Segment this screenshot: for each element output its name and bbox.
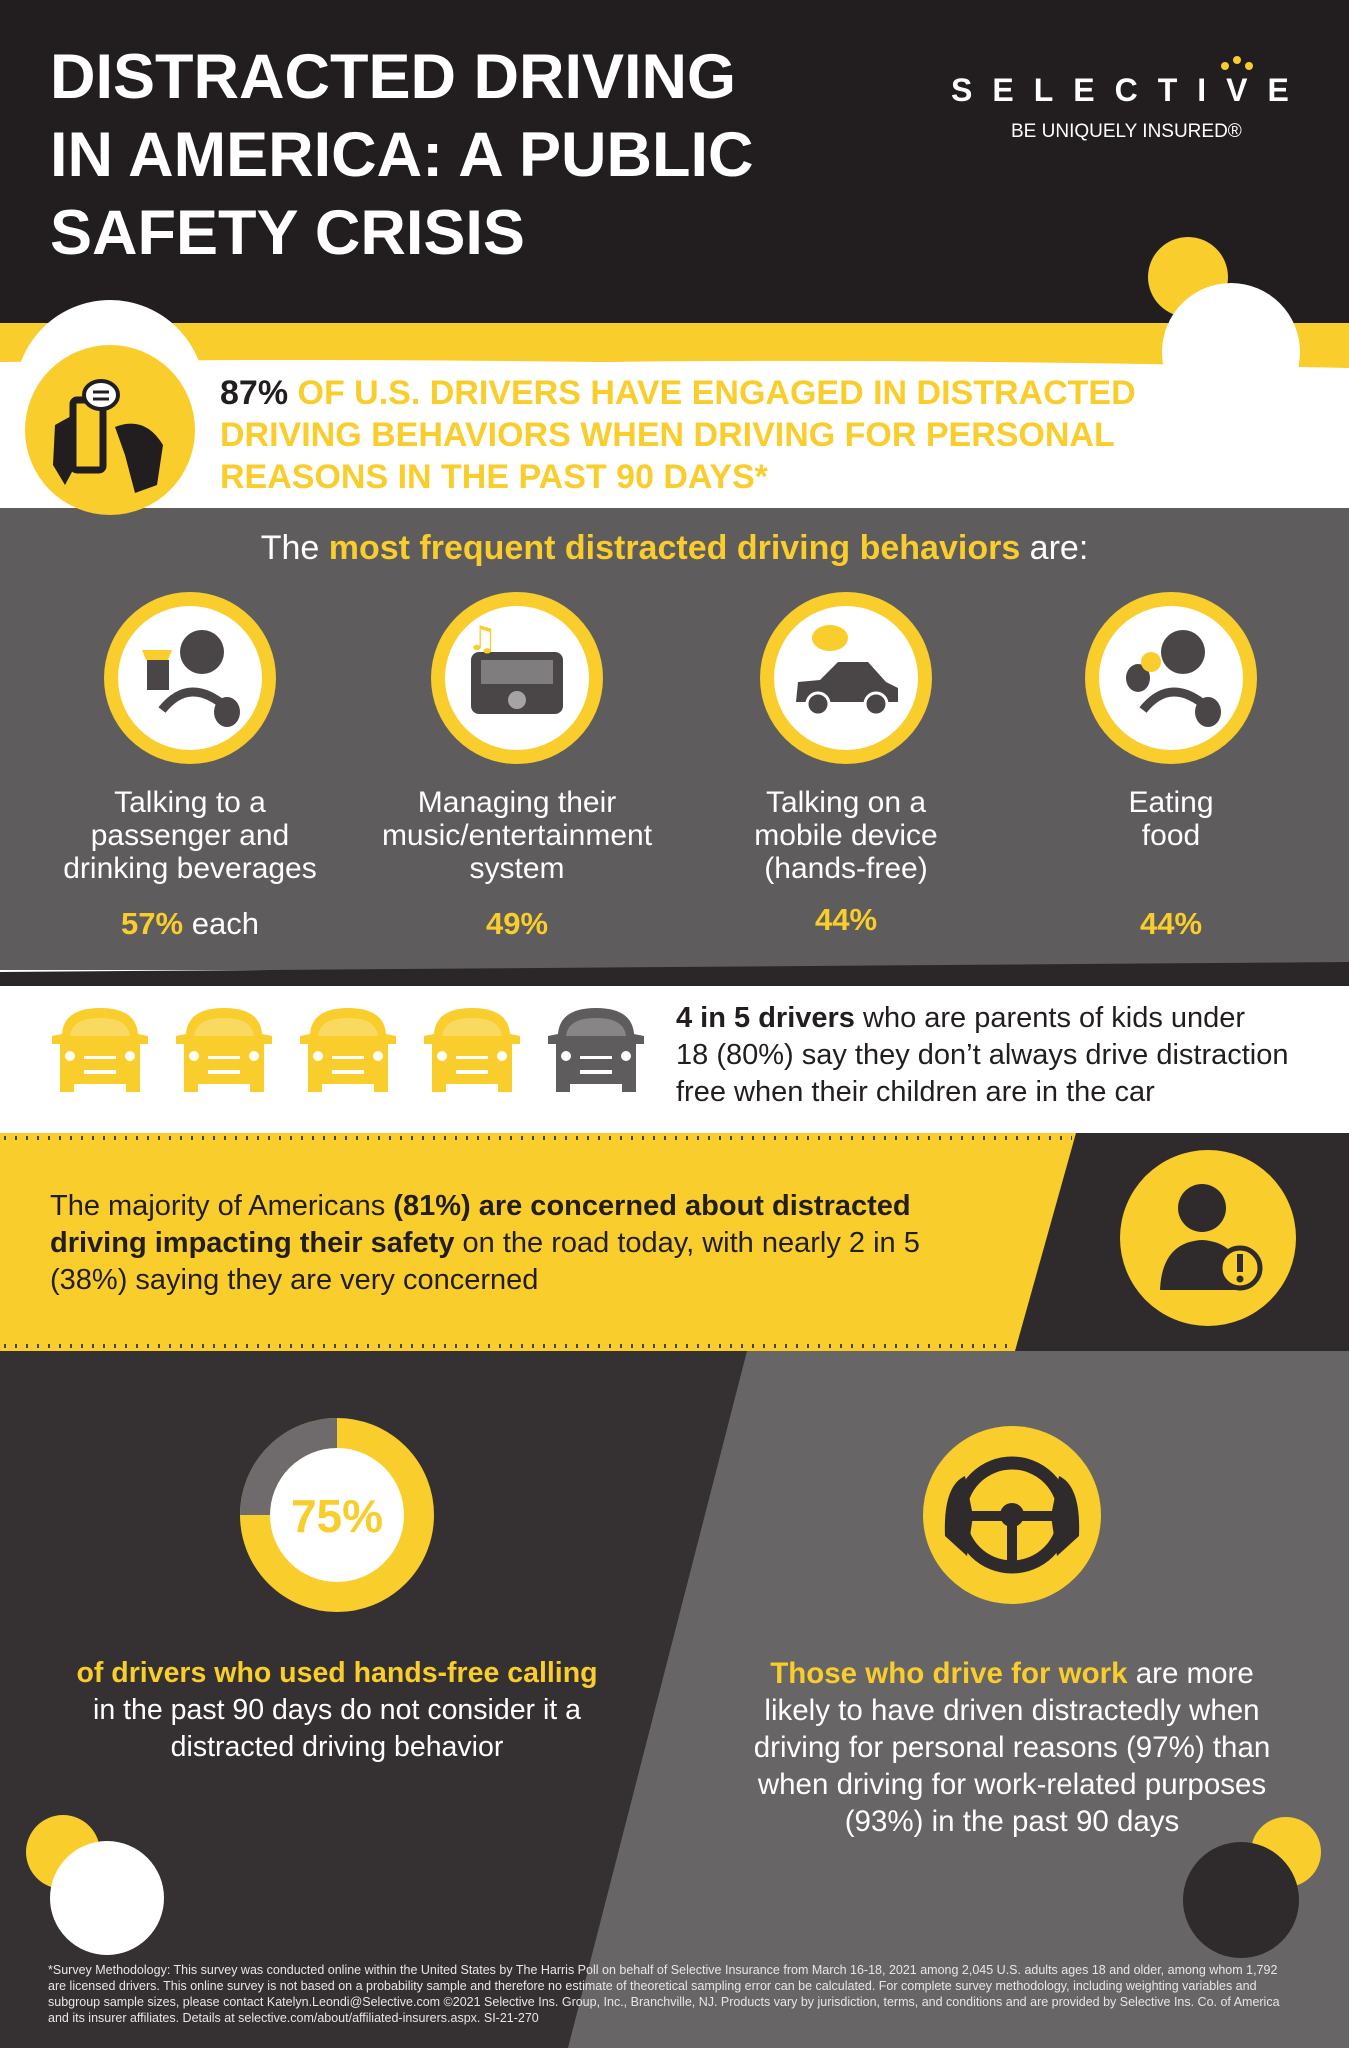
drive for work text: likely to have driven distractedly when: [764, 1694, 1260, 1727]
behaviors heading: The most frequent distracted driving behaviors are:: [261, 529, 1088, 567]
behavior 3: mobile hands-free: (hands-free): [764, 852, 928, 885]
behavior 1: talking and drinking: Talking to a: [114, 786, 266, 819]
behavior 4: eating: [1085, 592, 1257, 941]
concern statistic text: [50, 1190, 920, 1296]
title: DISTRACTED DRIVING: [50, 42, 736, 112]
icon: person with alert: [1120, 1150, 1296, 1326]
concern statistic text: driving impacting their safety on the road today, with nearly 2 in 5: [50, 1227, 920, 1259]
behavior 3: mobile hands-free: mobile device: [754, 819, 938, 852]
behavior 2: music: music/entertainment: [382, 819, 652, 852]
parents statistic text: 4 in 5 drivers who are parents of kids under: [676, 1002, 1245, 1034]
behavior 4: eating: 44%: [1140, 906, 1202, 941]
behavior 3: mobile hands-free: Talking on a: [766, 786, 926, 819]
parents statistic text: free when their children are in the car: [676, 1076, 1155, 1108]
icon: radio: [431, 592, 603, 764]
headline 87%: 87% OF U.S. DRIVERS HAVE ENGAGED IN DISTRACTED: [220, 374, 1136, 412]
title: IN AMERICA: A PUBLIC: [50, 120, 753, 190]
hands-free text: of drivers who used hands-free calling: [76, 1657, 598, 1689]
behavior 4: eating: Eating: [1128, 786, 1214, 819]
behavior 1: talking and drinking: drinking beverages: [63, 852, 317, 885]
behavior 2: music: Managing their: [418, 786, 616, 819]
headline 87%: DRIVING BEHAVIORS WHEN DRIVING FOR PERSONAL: [220, 416, 1115, 454]
behavior 3: mobile hands-free: [754, 592, 938, 937]
behavior 4: eating: food: [1142, 819, 1200, 852]
donut chart 75%: 75%: [291, 1490, 383, 1542]
behavior 2: music: [382, 592, 652, 941]
logo: BE UNIQUELY INSURED®: [1011, 121, 1242, 142]
icon: passenger drinking: [104, 592, 276, 764]
logo: [951, 56, 1309, 142]
hands-free text: [76, 1657, 598, 1763]
behavior 2: music: system: [469, 852, 564, 885]
drive for work text: when driving for work-related purposes: [758, 1768, 1266, 1801]
logo dots: [1221, 56, 1253, 70]
icon: eating: [1085, 592, 1257, 764]
icon: five cars: [52, 1008, 644, 1092]
headline 87%: REASONS IN THE PAST 90 DAYS*: [220, 458, 768, 496]
icon: radio: ♫: [467, 619, 497, 659]
icon: car with speech bubble: [760, 592, 932, 764]
behavior 2: music: 49%: [486, 906, 548, 941]
drive for work text: [754, 1657, 1270, 1838]
behavior 1: talking and drinking: [63, 592, 317, 941]
footnote: *Survey Methodology: This survey was conducted online within the United States by The Harris Poll on behalf of Selective Insurance from March 16-18, 2021 among 2,045 U.S. adults ages 18 and older, among whom 1,792 are licensed drivers. This online survey is not based on a probability sample and therefore no estimate of theoretical sampling error can be calculated. For complete survey methodology, including weighting variables and subgroup sample sizes, please contact Katelyn.Leondi@Selective.com ©2021 Selective Ins. Group, Inc., Branchville, NJ. Products vary by jurisdiction, terms, and conditions and are provided by Selective Ins. Co. of America and its insurer affiliates. Details at selective.com/about/affiliated-insurers.aspx. SI-21-270: [48, 1963, 1280, 2025]
hands-free text: in the past 90 days do not consider it a: [93, 1694, 581, 1726]
logo: SELECTIVE: [951, 72, 1309, 108]
concern statistic text: (38%) saying they are very concerned: [50, 1264, 538, 1296]
icon: steering wheel: [923, 1426, 1101, 1604]
headline 87%: [220, 374, 1136, 496]
behavior 3: mobile hands-free: 44%: [815, 902, 877, 937]
title: [50, 42, 753, 268]
drive for work text: driving for personal reasons (97%) than: [754, 1731, 1270, 1764]
concern statistic text: The majority of Americans (81%) are concerned about distracted: [50, 1190, 911, 1222]
drive for work text: (93%) in the past 90 days: [845, 1805, 1179, 1838]
behavior 1: talking and drinking: 57% each: [121, 906, 259, 941]
drive for work text: Those who drive for work are more: [770, 1657, 1254, 1690]
title: SAFETY CRISIS: [50, 198, 525, 268]
donut chart 75%: [240, 1418, 434, 1612]
parents statistic text: 18 (80%) say they don’t always drive distraction: [676, 1039, 1289, 1071]
icon: phone in hand: [25, 345, 195, 515]
parents statistic text: [676, 1002, 1289, 1108]
behavior 1: talking and drinking: passenger and: [91, 819, 289, 852]
hands-free text: distracted driving behavior: [171, 1731, 503, 1763]
